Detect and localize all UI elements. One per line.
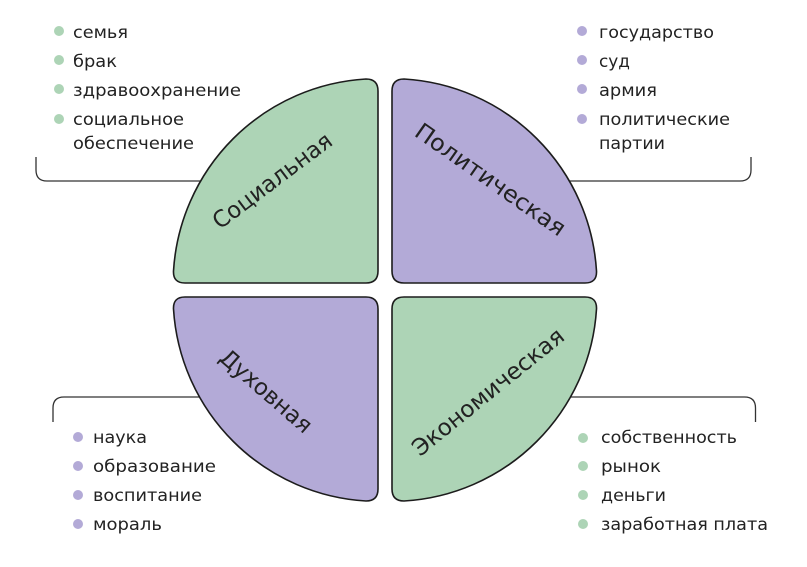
panel: political sector [392, 79, 597, 283]
panel: social sector [173, 79, 378, 283]
list: social: семья [73, 23, 128, 43]
list: political: государство [599, 23, 714, 43]
panel: economic sector [392, 297, 597, 501]
list: social [54, 23, 241, 154]
list: political: суд [599, 52, 630, 72]
bracket: economic [570, 397, 756, 422]
list: economic [578, 428, 768, 535]
bracket: spiritual [53, 397, 202, 422]
list: social: брак [73, 52, 117, 72]
label: spiritual: Духовная [214, 345, 317, 439]
list: spiritual: мораль [93, 515, 162, 535]
list: economic: заработная плата [601, 515, 768, 535]
list: social: обеспечение [73, 134, 194, 154]
list: spiritual: наука [93, 428, 147, 448]
list: political: политические [599, 110, 730, 130]
label: political: Политическая [410, 119, 570, 242]
list: social: здравоохранение [73, 81, 241, 101]
panel: spiritual sector [173, 297, 378, 501]
list: spiritual: образование [93, 457, 216, 477]
list: social: социальное [73, 110, 184, 130]
label: social: Социальная [208, 128, 338, 235]
list: economic: рынок [601, 457, 661, 477]
list: political: партии [599, 134, 665, 154]
label: economic: Экономическая [407, 323, 570, 462]
list: economic: деньги [601, 486, 666, 506]
list: economic: собственность [601, 428, 737, 448]
list: spiritual [73, 428, 216, 535]
bracket: political [568, 157, 751, 181]
bracket: social [36, 157, 202, 181]
list: political: армия [599, 81, 657, 101]
list: spiritual: воспитание [93, 486, 202, 506]
list: political [577, 23, 730, 154]
